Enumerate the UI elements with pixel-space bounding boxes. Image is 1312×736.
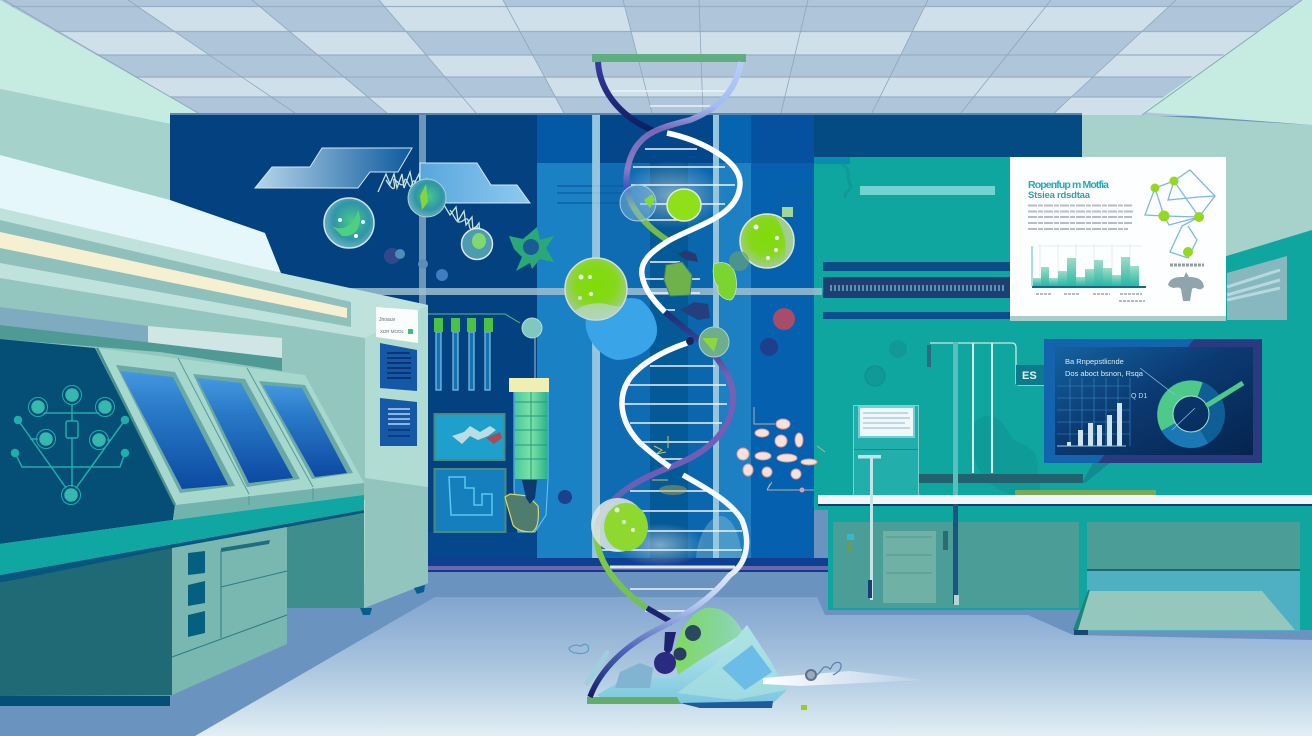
wall monitor xyxy=(1044,339,1262,463)
small green cube xyxy=(782,207,793,217)
touch screens xyxy=(116,365,353,493)
green dome xyxy=(673,608,760,682)
machine body xyxy=(0,208,428,608)
blue grey strip xyxy=(0,307,148,344)
teal green bubble xyxy=(699,327,729,357)
cell xyxy=(324,198,374,248)
ice fragments xyxy=(597,625,787,708)
floating panels xyxy=(255,148,530,203)
white strand lower xyxy=(590,343,747,697)
machine info panels xyxy=(380,343,417,446)
cabinet feet xyxy=(360,585,425,615)
large specimen tube xyxy=(505,378,549,532)
poster grey icon xyxy=(1168,272,1204,301)
left wall xyxy=(0,0,198,210)
top plate xyxy=(592,54,746,62)
lab analyser machine xyxy=(0,155,428,706)
ceiling xyxy=(0,0,1312,116)
red ball xyxy=(773,308,795,330)
machine label xyxy=(376,307,418,343)
dark stem xyxy=(664,632,676,655)
drawer cabinet xyxy=(172,527,287,695)
coloured strand middle xyxy=(596,312,733,608)
base recess xyxy=(287,513,364,608)
central organelle xyxy=(664,250,710,320)
dark ledge xyxy=(0,325,282,371)
label tag xyxy=(1016,365,1044,385)
device xyxy=(854,406,918,496)
monitor heading: Ba Rnpepstlicnde xyxy=(1065,357,1124,366)
monitor subheading: Dos aboct bsnon, Rsqa xyxy=(1065,369,1144,378)
dark base left xyxy=(0,548,172,696)
lower green cell xyxy=(591,498,648,552)
poster body text xyxy=(1028,206,1133,229)
screen housing xyxy=(97,348,364,520)
dark node xyxy=(686,337,694,345)
poster bar chart xyxy=(1032,244,1146,301)
poster icon caption xyxy=(1170,264,1204,266)
poster network diagram xyxy=(1145,170,1215,258)
side cabinet upper xyxy=(365,305,428,487)
glass tube xyxy=(587,653,607,683)
translucent cell xyxy=(620,185,656,221)
teal grey fascia xyxy=(0,278,365,500)
back wall colour blocks xyxy=(170,113,1082,572)
small chip xyxy=(801,705,807,710)
navy ball xyxy=(760,338,778,356)
navy strand end xyxy=(647,608,673,623)
machine top cover xyxy=(0,155,281,273)
circuit diagram icon xyxy=(12,386,128,504)
grey band with cream stripe xyxy=(0,220,351,327)
navy control panel xyxy=(0,339,175,544)
test tube rack xyxy=(428,314,542,390)
centre green cell xyxy=(667,189,701,221)
coloured strand top xyxy=(626,62,741,240)
specimen photo panels xyxy=(434,414,506,532)
poster title: Ropenfup m Motfia xyxy=(1028,179,1109,191)
loop squiggle xyxy=(569,644,589,654)
dark strand top xyxy=(598,62,657,132)
right side lab: IV stands, device, shelf xyxy=(854,343,1156,496)
small spheres xyxy=(384,248,448,281)
fibres xyxy=(378,172,482,236)
monitor bar chart: Q D1 xyxy=(1131,393,1147,400)
large green cell left xyxy=(565,258,627,320)
navy sphere xyxy=(558,490,572,504)
blue blob xyxy=(586,298,657,360)
teal counter xyxy=(0,495,364,575)
ring xyxy=(806,670,816,680)
label tag: ES xyxy=(1022,370,1037,382)
wall info plate xyxy=(1227,256,1287,320)
monitor donut chart xyxy=(1140,368,1243,440)
pillars xyxy=(280,115,822,558)
dark balls xyxy=(654,625,701,674)
bottom plate xyxy=(587,697,681,704)
wedge blade xyxy=(763,671,925,686)
helix rungs xyxy=(600,91,742,611)
light ledge xyxy=(148,326,282,358)
loop squiggle right xyxy=(817,662,841,675)
bottom specimen pile xyxy=(569,608,925,710)
large green cell right xyxy=(740,214,794,268)
poster subtitle: Stsiea rdsdtaa xyxy=(1028,190,1091,201)
cell xyxy=(462,228,492,260)
floating cells and fibres xyxy=(324,172,554,281)
green star organism xyxy=(509,227,554,271)
pale sphere xyxy=(729,251,749,271)
machine label: Jnoauv xyxy=(379,317,396,323)
poster xyxy=(1010,157,1226,321)
right wall xyxy=(1082,0,1312,300)
pink cell cluster xyxy=(652,407,825,495)
white strand upper xyxy=(642,133,740,312)
cell xyxy=(408,179,446,217)
floor xyxy=(0,572,1312,736)
DNA double helix xyxy=(587,54,747,704)
machine label: XDR MOOL xyxy=(380,329,405,334)
counter and lower cabinets xyxy=(818,342,1312,635)
teal wall xyxy=(814,157,1312,510)
green cells on helix xyxy=(558,185,795,552)
side cabinet lower xyxy=(364,478,428,608)
green leaf xyxy=(713,263,737,300)
monitor bar chart xyxy=(1057,378,1147,446)
